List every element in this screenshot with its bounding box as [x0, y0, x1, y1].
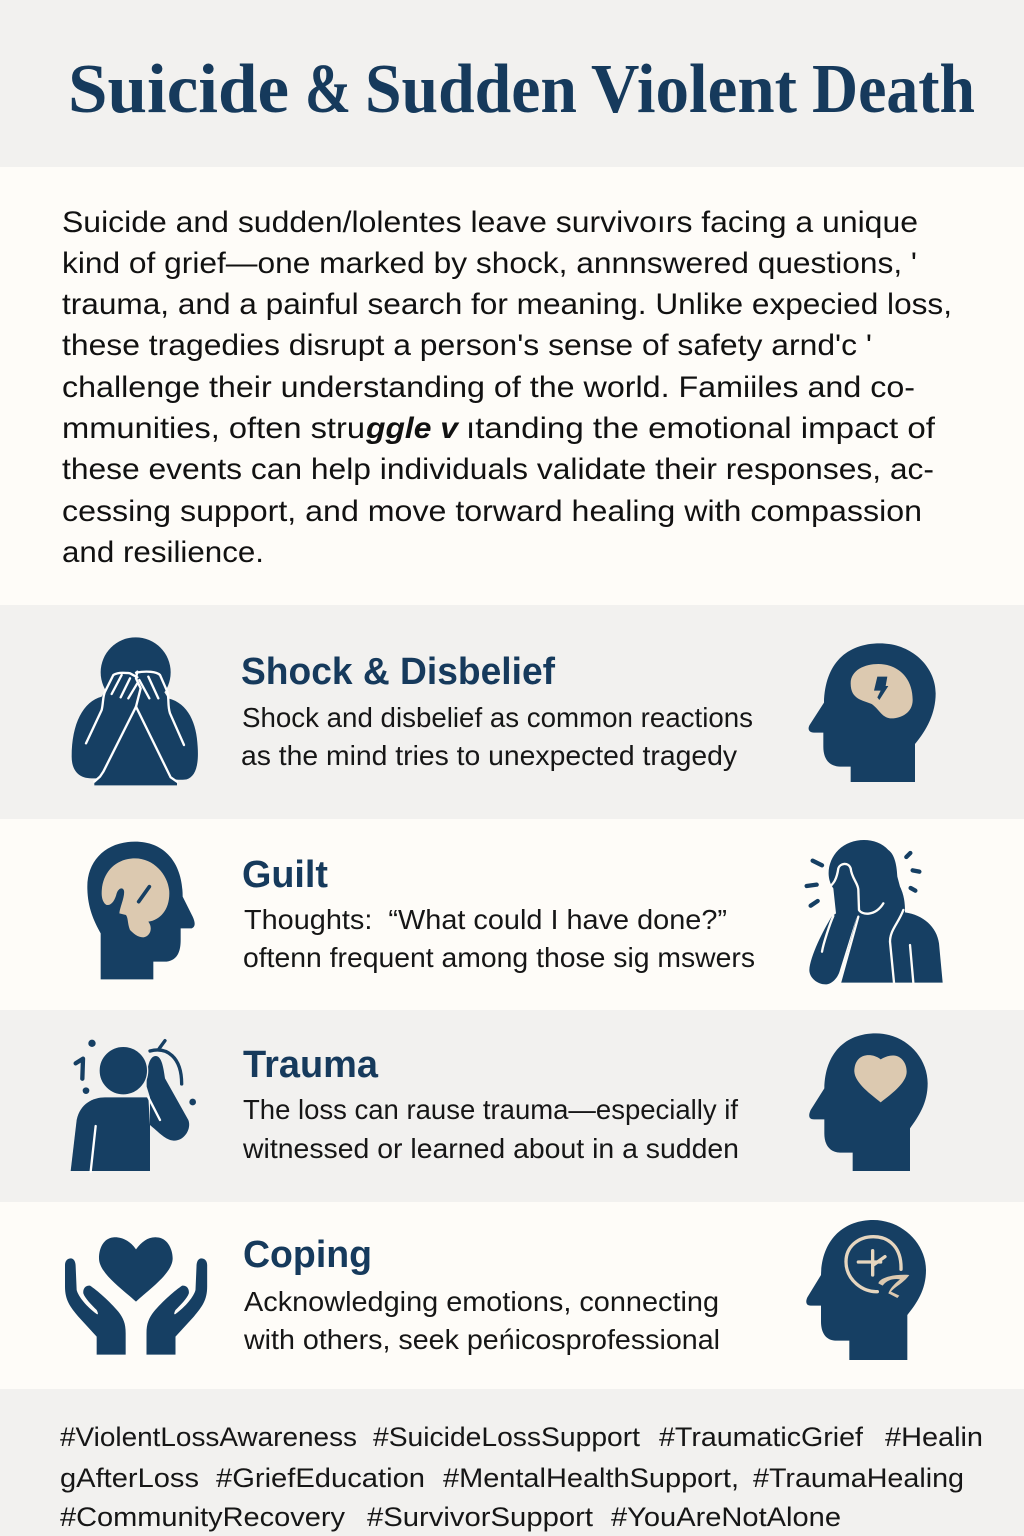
title: & — [305, 51, 351, 128]
title: Sudden — [365, 51, 577, 128]
title — [68, 51, 975, 128]
description: guilt: oftenn frequent among those sig mswers — [243, 942, 755, 973]
title: Suicide — [68, 51, 289, 128]
hashtags: #SuicideLossSupport — [373, 1422, 641, 1452]
heading: trauma: Trauma — [243, 1044, 379, 1086]
hashtags: #TraumaHealing — [753, 1463, 964, 1493]
description: trauma: The loss can rause trauma—especially if — [243, 1094, 738, 1125]
intro text block: ıtanding the emotional impact of — [466, 412, 936, 445]
hashtags: #MentalHealthSupport, — [443, 1463, 739, 1493]
description: shock and disbelief: as the mind tries to unexpected tragedy — [241, 740, 737, 771]
hashtags: #Healin — [885, 1422, 983, 1452]
hashtags: #YouAreNotAlone — [611, 1502, 841, 1532]
description: shock and disbelief: Shock and disbelief as common reactions — [242, 702, 753, 733]
intro text block: challenge their understanding of the world. Famiiles and co- — [62, 371, 915, 404]
panel: hashtag footer — [0, 1389, 1024, 1536]
intro text block: these events can help individuals validate their responses, ac- — [62, 453, 934, 486]
title: Violent — [591, 51, 797, 128]
icon: hands holding heart — [65, 1237, 207, 1355]
intro text block — [62, 206, 952, 569]
intro text block: ggle v — [365, 412, 460, 445]
heading: guilt: Guilt — [242, 854, 328, 896]
panel: coping — [0, 1202, 1024, 1389]
icon: person with hand to head — [71, 1040, 196, 1172]
description: guilt — [243, 904, 755, 973]
description: trauma: witnessed or learned about in a sudden — [242, 1133, 739, 1164]
heading: shock and disbelief: Shock & Disbelief — [241, 651, 555, 693]
icon: distressed person holding head — [807, 840, 943, 984]
heading: coping: Coping — [243, 1234, 372, 1276]
description: coping: with others, seek peńicosprofessional — [243, 1324, 720, 1355]
hashtags — [60, 1422, 983, 1532]
icon: head with troubled brain — [87, 842, 195, 979]
hashtags: #CommunityRecovery — [60, 1502, 346, 1532]
icon: head with healing symbol — [806, 1220, 926, 1360]
description: trauma — [242, 1094, 739, 1164]
panel: header — [0, 0, 1024, 167]
panel: introduction — [0, 167, 1024, 605]
hashtags: #ViolentLossAwareness — [60, 1422, 357, 1452]
title: Death — [812, 51, 975, 128]
hashtags: #GriefEducation — [216, 1463, 425, 1493]
description: coping — [243, 1286, 720, 1355]
description: coping: Acknowledging emotions, connecting — [244, 1286, 719, 1317]
panel: guilt — [0, 819, 1024, 1010]
panel: trauma — [0, 1010, 1024, 1202]
panel: shock and disbelief — [0, 605, 1024, 819]
description: shock and disbelief — [241, 702, 753, 771]
intro text block: trauma, and a painful search for meaning. Unlike expecied loss, — [62, 288, 952, 321]
icon: head with heart — [809, 1033, 928, 1171]
hashtags: gAfterLoss — [60, 1463, 199, 1493]
intro text block: kind of grief—one marked by shock, annnswered questions, ' — [62, 247, 917, 280]
description: guilt: Thoughts: “What could I have done?” — [244, 904, 727, 935]
intro text block: and resilience. — [62, 536, 264, 569]
hashtags: #SurvivorSupport — [367, 1502, 594, 1532]
intro text block: these tragedies disrupt a person's sense of safety arnd'c ' — [62, 329, 872, 362]
intro text block: Suicide and sudden/lolentes leave survivoırs facing a unique — [62, 206, 918, 239]
icon: head with lightning brain — [809, 643, 936, 782]
hashtags: #TraumaticGrief — [659, 1422, 864, 1452]
icon: person covering face — [72, 637, 198, 785]
intro text block: cessing support, and move torward healing with compassion — [62, 495, 922, 528]
intro text block: mmunities, often stru — [62, 412, 365, 445]
